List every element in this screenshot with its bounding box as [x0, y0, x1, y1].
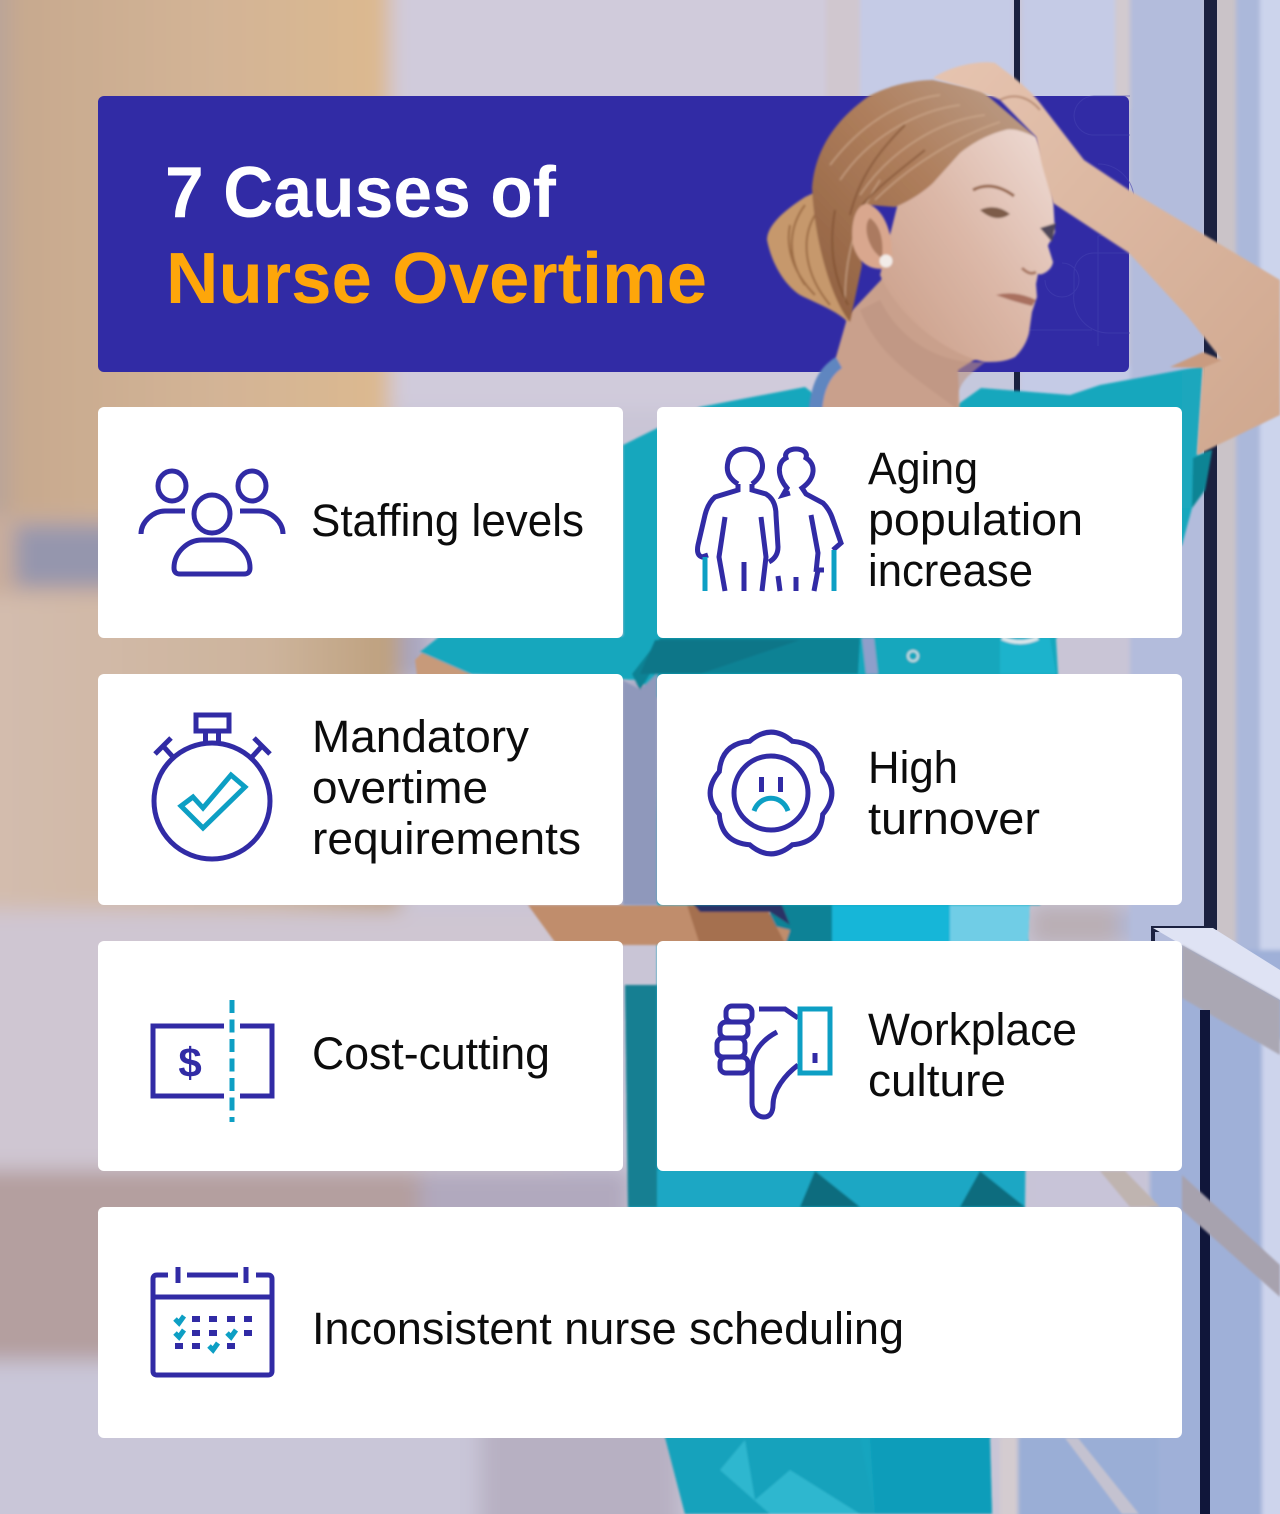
label: population [868, 494, 1083, 545]
icon: calendar [153, 1267, 272, 1375]
label: requirements [312, 813, 581, 864]
raised arm and hand [933, 62, 1280, 455]
window sill [1153, 928, 1280, 1000]
icon: sad face badge [710, 732, 832, 854]
icon: thumbs down [717, 1006, 830, 1117]
card: inconsistent nurse scheduling: Inconsistent nurse scheduling [312, 1303, 904, 1354]
icon: elderly couple with canes [698, 449, 841, 591]
card: high turnover [657, 674, 1182, 905]
label [868, 1004, 1077, 1106]
lower body scrubs [625, 940, 1028, 1514]
label: culture [868, 1055, 1006, 1106]
neck and stethoscope [805, 260, 990, 418]
upper body scrubs [415, 365, 1212, 905]
title: 7 Causes of [165, 153, 557, 233]
icon: dollar bill cut: $ [178, 1039, 202, 1086]
card: staffing levels: Staffing levels [311, 495, 584, 546]
card: cost-cutting: Cost-cutting [312, 1028, 550, 1079]
handrails [1065, 1171, 1280, 1514]
card: staffing levels [98, 407, 623, 638]
label [312, 711, 581, 864]
label: overtime [312, 762, 488, 813]
icon: dollar bill cut [153, 1000, 272, 1122]
title [165, 153, 707, 319]
card: mandatory overtime requirements [98, 674, 623, 905]
photo: nurse cut-out [415, 62, 1280, 1514]
label: Mandatory [312, 711, 530, 762]
label: Aging [868, 443, 978, 494]
card: cost-cutting [98, 941, 623, 1171]
card: aging population increase [657, 407, 1182, 638]
title: Nurse Overtime [166, 239, 707, 319]
icon: stopwatch with check [154, 715, 270, 859]
label: High [868, 742, 958, 793]
waist and resting hand [528, 900, 1030, 945]
head, hair and bun [767, 80, 1056, 362]
label [868, 742, 1040, 844]
label: Workplace [868, 1004, 1077, 1055]
card: inconsistent nurse scheduling [98, 1207, 1182, 1438]
label [868, 443, 1083, 596]
label: increase [868, 545, 1033, 596]
icon: group of people [141, 471, 283, 574]
banner panel [98, 96, 1134, 372]
label: turnover [868, 793, 1040, 844]
card: workplace culture [657, 941, 1182, 1171]
